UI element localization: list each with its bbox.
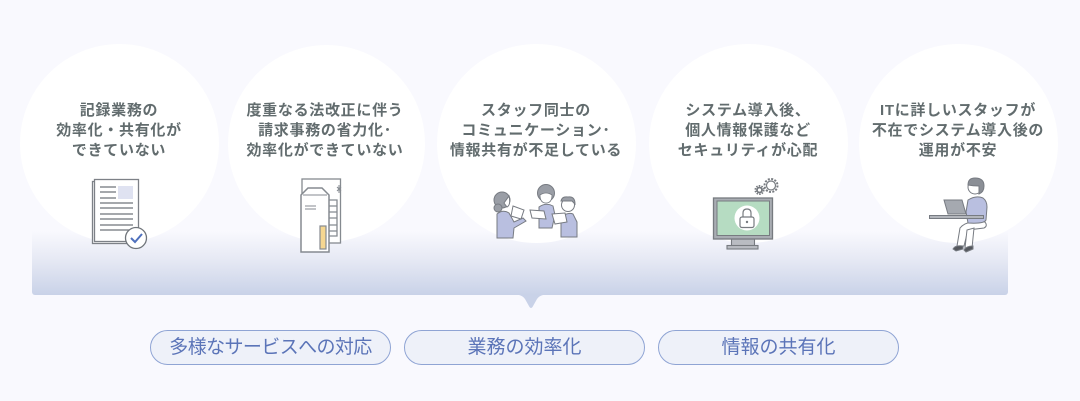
caption 4: システム導入後、 [685,102,811,119]
circle 4 [649,44,848,243]
gradient band [32,231,1008,295]
caption 4 [678,102,818,159]
caption 1 [56,102,182,159]
pill: diverse services: 多様なサービスへの対応 [169,337,372,358]
caption 5 [872,102,1044,159]
caption 2 [246,102,404,159]
caption 3: 情報共有が不足している [450,142,622,159]
caption 1: 効率化・共有化が [56,122,182,139]
circle 1 [20,44,219,243]
pill: efficiency [404,330,645,365]
caption 4: 個人情報保護など [685,122,811,139]
pill: information sharing: 情報の共有化 [721,337,836,358]
caption 2: 効率化ができていない [246,142,404,159]
caption 4: セキュリティが心配 [678,142,818,159]
caption 1: できていない [72,142,166,159]
caption 2: 請求事務の省力化･ [258,122,392,139]
circle 5 [859,44,1058,243]
pill: efficiency: 業務の効率化 [467,337,582,358]
caption 5: 運用が不安 [919,142,997,159]
caption 5: 不在でシステム導入後の [872,122,1044,139]
circle 3 [437,44,636,243]
caption 2: 度重なる法改正に伴う [246,102,404,119]
caption 1: 記録業務の [80,102,158,119]
pill: information sharing [658,330,899,365]
circle 2 [228,45,425,242]
caption 3: コミュニケーション･ [461,122,611,139]
caption 3: スタッフ同士の [481,102,591,119]
pill: diverse services [150,330,391,365]
caption 3 [450,102,622,159]
caption 5: ITに詳しいスタッフが [880,102,1036,119]
